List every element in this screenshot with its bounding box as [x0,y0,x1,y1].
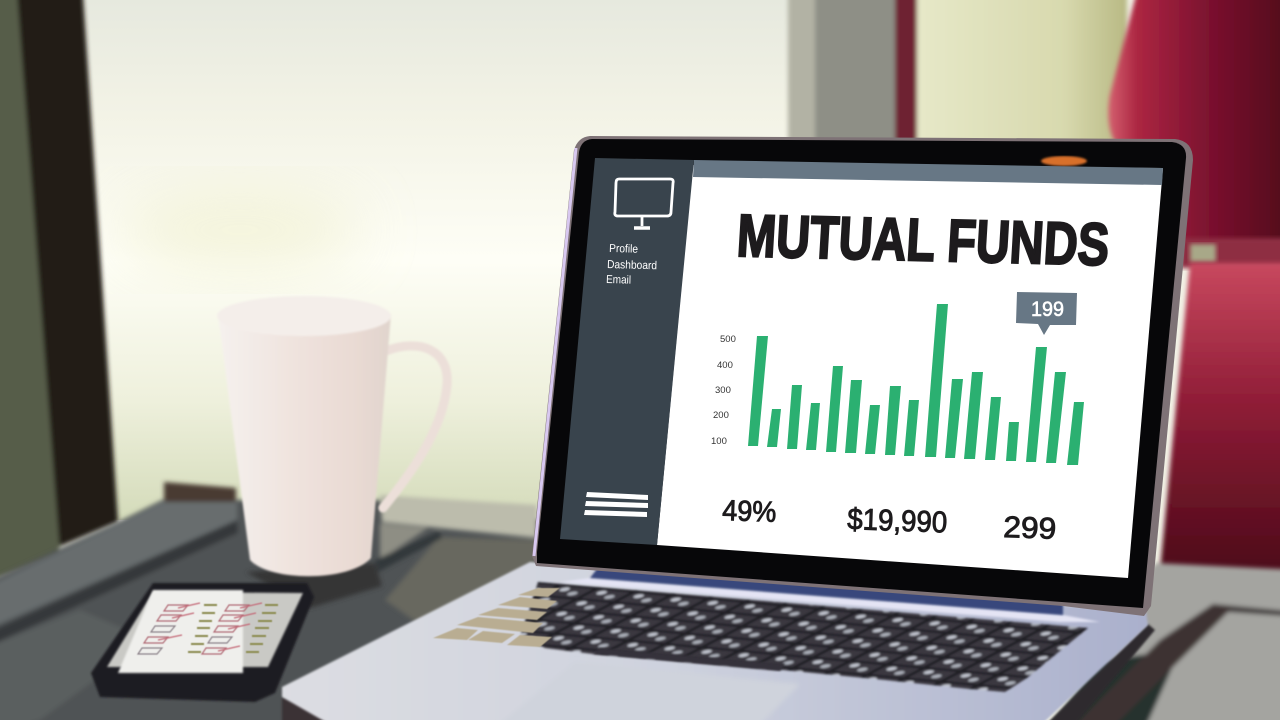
chart axis labels: 500 [720,334,736,345]
base deck [282,562,1148,720]
base front shadow [282,697,360,720]
desk surface [0,482,1280,720]
stat: 49%: 49% [722,495,777,529]
chart axis labels: 400 [717,360,733,371]
top bar [693,160,1163,185]
checklist marks [138,603,278,654]
space bar and lower keys [593,648,785,671]
icon: monitor [615,179,673,228]
sidebar menu labels: Email [606,274,631,287]
mug body [218,314,391,576]
lid edge [532,136,1193,616]
keyboard [520,582,1088,692]
trackpad [480,662,800,720]
coffee mug [217,296,447,576]
webcam reflection [1041,156,1087,166]
laptop base [282,562,1155,720]
title: MUTUAL FUNDS [735,202,1111,278]
desk right side [1040,563,1280,720]
tan keys at left edge of keyboard [433,588,560,647]
callout: 199: 199 [1031,298,1064,321]
mug handle [383,346,447,508]
laptop lid [532,136,1193,616]
chart axis labels: 100 [711,436,727,447]
lid black bezel [537,139,1186,608]
mug rim [217,296,391,336]
bright strip behind keyboard [560,578,1100,622]
stat: $19,990: $19,990 [847,503,948,539]
base side edge [1030,624,1155,720]
background: grey frame, red post and pale window at right [788,0,1127,160]
chart axis labels: 300 [715,385,731,396]
laptop screen [560,158,1163,578]
sidebar menu labels: Dashboard [607,259,657,272]
sidebar menu labels [606,243,657,287]
lid left highlight [534,148,576,556]
chart axis labels [711,334,736,447]
phone screen [107,592,303,667]
smartphone with checklist [91,583,314,702]
callout: 199 [1016,292,1077,335]
hinge [590,565,1063,615]
sidebar [560,158,694,545]
phone body [91,583,314,702]
white content area [657,165,1163,578]
background: dark window frame at left [0,0,118,585]
chart axis labels: 200 [713,410,729,421]
sidebar menu labels: Profile [609,243,638,256]
icon: hamburger menu [584,492,648,517]
desk left plank [0,482,540,720]
window sill and wood pieces [246,495,537,625]
stat: 299: 299 [1003,511,1057,546]
background: red chair [1108,0,1280,578]
bar chart [748,304,1084,465]
